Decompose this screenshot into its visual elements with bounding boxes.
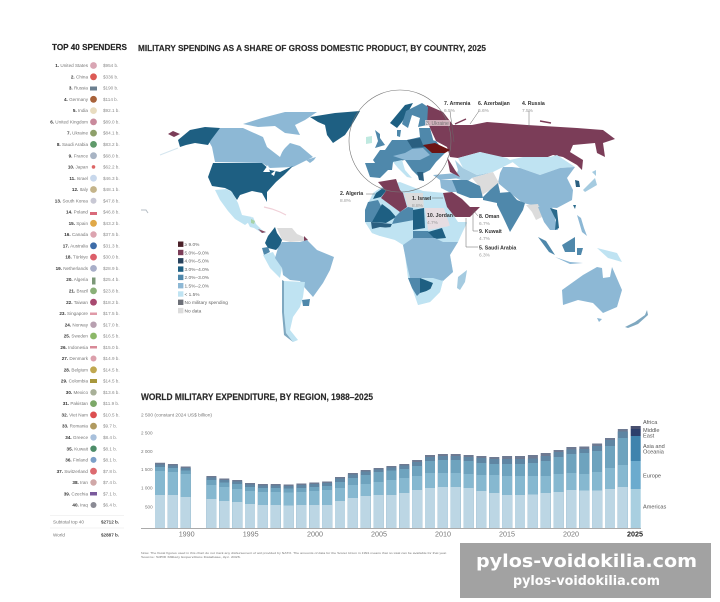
region labels: East: [643, 434, 655, 440]
world total: [50, 528, 124, 537]
region: Denmark: [397, 130, 401, 137]
row 26: $15.0 b.: [103, 345, 120, 350]
row 38: 38. Iran: [72, 480, 88, 485]
region labels: Americas: [643, 504, 667, 510]
region: Brazil and Bolivia: [275, 240, 334, 297]
region: Central America: [247, 217, 266, 233]
region: Suriname: [304, 236, 308, 242]
Panama accent: [258, 229, 266, 233]
series: Africa: [155, 429, 628, 528]
row 6: $89.0 b.: [103, 120, 120, 124]
row 37: [57, 468, 117, 475]
region labels: Middle: [643, 428, 659, 434]
region: Peru: [263, 252, 282, 278]
Europe landmass: [373, 137, 445, 176]
row 23: $17.5 b.: [103, 311, 120, 316]
region: Libya: [404, 193, 424, 208]
callout: Kuwait: 4.7%: [479, 236, 491, 242]
row 25: 25. Sweden: [64, 334, 88, 339]
row 5: $92.1 b.: [103, 108, 120, 113]
row 11: 11. Israel: [69, 176, 88, 181]
callout: Oman: 8. Oman: [479, 214, 499, 220]
Hawaii: [141, 210, 148, 213]
row 7: $84.1 b.: [103, 131, 120, 136]
watermark: [460, 543, 711, 598]
row 11: [69, 175, 120, 182]
region: Turkey: [433, 173, 460, 180]
row 8: [57, 141, 120, 148]
row 33: [62, 423, 117, 430]
row 40: [72, 502, 117, 508]
region labels: Europe: [643, 474, 661, 480]
region: Central Africa band: [413, 231, 435, 238]
callout: Jordan: 4.7%: [427, 220, 439, 226]
row 18: [65, 254, 120, 260]
region: Argentina: [283, 281, 305, 342]
region: Kazakhstan: [458, 152, 513, 175]
Great Lakes: [263, 165, 276, 176]
row 3: 3. Russia: [69, 86, 88, 91]
heading: map title: MILITARY SPENDING AS A SHARE OF GROSS DOMESTIC PRODUCT, BY COUNTRY, 2025: [138, 43, 486, 53]
row 31: $11.9 b.: [103, 401, 119, 406]
region: Greenland: [310, 111, 360, 143]
row 1: $954 b.: [103, 63, 118, 68]
row 3: [69, 86, 118, 91]
row 2: [71, 73, 118, 80]
row 21: 21. Brazil: [69, 288, 88, 294]
Aleutians: [160, 148, 178, 155]
row 7: [67, 130, 120, 137]
row 38: $7.4 b.: [103, 480, 117, 485]
row 15: [69, 220, 120, 227]
region: Iraq and Syria: [440, 180, 457, 192]
row 21: $23.8 b.: [103, 288, 120, 294]
region: Botswana: [420, 278, 433, 293]
label: Ukraine: 3. Ukraine: [426, 121, 449, 127]
region: Guinea coast: [365, 222, 392, 236]
row 16: 16. Canada: [64, 232, 88, 237]
row 39: [64, 491, 117, 496]
row 29: [61, 379, 120, 384]
row 7: 7. Ukraine: [67, 131, 88, 136]
region: Baltics and Belarus: [419, 128, 434, 145]
row 26: 26. Indonesia: [60, 345, 88, 350]
world map: [141, 90, 648, 342]
footnote: Note: The fiscal figures used in this chart do not track any disbursement of aid provided by NATO. The amounts of data for the Soviet Union in 1991 means that no total can be available for that year.: [141, 551, 447, 555]
row 16: [64, 231, 120, 238]
Caribbean: [264, 207, 286, 215]
row 20: $25.4 b.: [103, 277, 120, 282]
region: Australia: [562, 267, 622, 313]
region: Afghanistan: [472, 172, 499, 195]
row 15: $43.2 b.: [103, 221, 120, 226]
Central Asia: [455, 160, 493, 182]
row 1: [55, 62, 118, 69]
region: China: [498, 167, 575, 208]
callout: Israel: 1. Israel: [412, 196, 432, 202]
x axis year labels: 2025: [627, 530, 643, 538]
row 10: [68, 164, 120, 170]
callout lines: [366, 111, 529, 247]
row 24: $17.0 b.: [103, 322, 120, 327]
row 20: [66, 277, 120, 284]
row 27: $14.9 b.: [103, 356, 120, 361]
y axis labels: 2 500: [141, 430, 153, 436]
stacked bar chart: [155, 426, 641, 528]
region: Italy: [393, 160, 412, 178]
row 14: $46.8 b.: [103, 210, 120, 215]
row 28: $14.5 b.: [103, 367, 120, 372]
series: Middle East: [155, 432, 628, 528]
row 32: $10.5 b.: [103, 412, 120, 418]
region: Japan: [583, 170, 597, 192]
row 38: [72, 479, 117, 486]
x axis year labels: 1990: [179, 530, 195, 538]
y axis labels: 1 500: [141, 467, 153, 472]
row 11: $46.3 b.: [103, 176, 120, 181]
region: Tasmania: [597, 318, 602, 322]
row 30: $13.6 b.: [103, 390, 120, 395]
region labels: Oceania: [643, 450, 665, 456]
row 13: $47.8 b.: [103, 198, 120, 203]
inset circle: Europe: [349, 90, 451, 192]
region: Thailand and Indochina: [538, 207, 558, 230]
series: Europe: [155, 465, 628, 528]
Arctic islands: [455, 119, 551, 124]
row 23: [59, 311, 120, 316]
row 35: 35. Kuwait: [67, 446, 89, 451]
region: Java: [555, 257, 583, 264]
region: Canada: [208, 112, 317, 168]
region: Egypt: [423, 193, 444, 208]
row 28: [64, 366, 120, 373]
row 19: $28.9 b.: [103, 266, 120, 271]
world total: $2887 b.: [101, 532, 119, 537]
row 2: 2. China: [71, 74, 88, 79]
callout: Israel: 8.8%: [412, 203, 424, 209]
map legend: 3.0%–4.0%: [184, 267, 210, 273]
region: Norway: [390, 103, 413, 128]
region: Korea: [575, 180, 580, 187]
chart subtitle: 2 500 (constant 2024 US$ billion): [141, 412, 212, 418]
row 37: $7.8 b.: [103, 469, 117, 474]
region: Mali: [372, 204, 396, 223]
x axis year labels: 2015: [499, 530, 515, 538]
row 10: $62.2 b.: [103, 164, 120, 170]
footnote: Source: SIPRI Military Expenditure Database, Apr. 2026.: [141, 555, 241, 559]
region: Uruguay: [302, 299, 310, 306]
row 3: $190 b.: [103, 86, 118, 91]
row 35: $8.1 b.: [103, 446, 117, 451]
region: Central and East Africa: [403, 238, 458, 281]
region: Iran: [450, 180, 483, 198]
x axis year labels: 2020: [563, 530, 579, 538]
region: Madagascar: [457, 270, 467, 290]
region: Burkina band: [371, 222, 392, 229]
row 4: $114 b.: [103, 97, 118, 102]
region: Greece: [417, 172, 424, 181]
row 33: $9.7 b.: [103, 424, 117, 429]
row 29: 29. Colombia: [61, 379, 88, 384]
row 10: 10. Japan: [68, 164, 88, 170]
x axis year labels: 2000: [307, 530, 323, 538]
series: Asia and Oceania: [155, 438, 628, 528]
callout: Kuwait: [479, 229, 502, 242]
region labels: [643, 420, 667, 510]
row 17: $31.3 b.: [103, 243, 120, 248]
row 21: [69, 288, 120, 294]
map legend: 1.5%–2.0%: [184, 284, 210, 290]
callout: Russia: [522, 101, 545, 114]
map legend: < 1.5%: [184, 292, 200, 298]
region: Niger: [392, 207, 414, 224]
callout: Saudi Arabia: [479, 246, 516, 258]
row 4: [64, 96, 118, 103]
region: Chad: [413, 208, 425, 230]
callout: Israel: [412, 196, 432, 209]
region: Sudan: [425, 208, 450, 230]
row 32: 32. Viet Nam: [62, 412, 88, 418]
callout: Armenia: 7. Armenia: [444, 101, 470, 107]
row 36: [65, 457, 117, 463]
row 34: [65, 434, 117, 441]
row 39: 39. Czechia: [64, 491, 88, 496]
y axis labels: 500: [145, 504, 153, 509]
callout: Jordan: [427, 213, 453, 226]
region: Mongolia: [510, 155, 575, 175]
region: South Sudan: [428, 228, 446, 239]
row 40: $6.4 b.: [103, 503, 117, 508]
callout: Russia: 4. Russia: [522, 101, 545, 107]
callout: Azerbaijan: 6. Azerbaijan: [478, 101, 510, 107]
footnote: [141, 551, 447, 559]
row 22: [66, 299, 120, 306]
x axis year labels: [179, 530, 643, 538]
region: Sumatra: [538, 237, 555, 255]
map legend: 4.0%–5.0%: [184, 259, 210, 265]
row 17: 17. Australia: [63, 243, 88, 248]
x axis year labels: 1995: [243, 530, 259, 538]
region: Venezuela and Guianas: [277, 228, 306, 242]
row 5: 5. India: [73, 108, 88, 113]
row 8: 8. Saudi Arabia: [57, 142, 88, 147]
callout: Jordan: 10. Jordan: [427, 213, 453, 219]
row 14: 14. Poland: [66, 210, 88, 215]
row 8: $83.2 b.: [103, 142, 120, 147]
row 9: $68.0 b.: [103, 153, 120, 158]
callout: Azerbaijan: 6.6%: [478, 108, 490, 114]
region: New Guinea: [597, 248, 622, 262]
map legend: 5.0%–9.0%: [184, 250, 210, 256]
row 18: 18. Türkiye: [65, 255, 88, 260]
map legend: No military spending: [184, 300, 228, 306]
Chukotka: [168, 131, 180, 137]
row 25: $16.5 b.: [103, 334, 120, 339]
row 35: [67, 446, 117, 452]
callout: Algeria: 8.8%: [340, 198, 352, 204]
region: Vietnam: [550, 208, 559, 230]
callout: Saudi Arabia: 6.3%: [479, 252, 491, 258]
callout: Kuwait: 9. Kuwait: [479, 229, 502, 235]
region: UK: [375, 130, 385, 148]
region: Saudi Arabia: [443, 192, 480, 217]
callout: Armenia: 6.5%: [444, 108, 456, 114]
row 32: [62, 412, 120, 418]
region: Russia: [424, 105, 615, 170]
row 1: 1. United States: [55, 63, 89, 68]
region: Chile: [282, 280, 293, 342]
row 13: [55, 198, 120, 204]
callout: Algeria: 2. Algeria: [340, 191, 363, 197]
row 4: 4. Germany: [64, 97, 89, 102]
Guatemala accent: [251, 219, 255, 224]
callout: Russia: 7.5%: [522, 108, 534, 114]
row 20: 20. Algeria: [66, 277, 88, 282]
row 6: [50, 118, 120, 125]
region: Sweden and Finland: [402, 103, 428, 128]
region: New Zealand: [625, 310, 648, 328]
world total: World: [53, 532, 65, 537]
region: Philippines: [577, 215, 587, 236]
row 30: [66, 389, 120, 395]
row 33: 33. Romania: [62, 424, 88, 429]
subtotal: [50, 516, 124, 525]
Africa landmass: [365, 182, 467, 305]
row 12: 12. Italy: [72, 187, 89, 192]
Hudson Bay: [266, 134, 289, 155]
row 19: 19. Netherlands: [56, 266, 89, 271]
region: Colombia: [265, 227, 282, 250]
row 40: 40. Iraq: [72, 503, 88, 508]
y axis labels: 2 000: [141, 449, 153, 454]
region: Morocco: [373, 188, 386, 199]
callout: Armenia: [444, 101, 470, 114]
row 16: $37.5 b.: [103, 232, 120, 237]
bar: 2025: [631, 426, 641, 528]
row 31: 31. Pakistan: [63, 401, 88, 406]
region: India: [497, 192, 525, 232]
row 29: $14.5 b.: [103, 379, 120, 384]
row 13: 13. South Korea: [55, 198, 88, 203]
region: Poland: [407, 138, 425, 148]
row 19: [56, 265, 120, 272]
region: Mexico: [215, 189, 252, 225]
row 26: [60, 345, 120, 350]
callout: Oman: 6.7%: [479, 221, 491, 227]
callout: Algeria: [340, 191, 363, 204]
region: Sulawesi: [577, 248, 583, 255]
row 18: $30.0 b.: [103, 255, 120, 260]
map legend: No data: [184, 308, 202, 314]
watermark: pylos-voidokilia.com: [476, 551, 697, 572]
row 5: [73, 107, 120, 114]
x axis: [141, 527, 641, 529]
region: Mauritania and Senegal: [365, 200, 387, 222]
row 22: 22. Taiwan: [66, 300, 88, 305]
map legend: 2.0%–3.0%: [184, 275, 210, 281]
x axis year labels: 2010: [435, 530, 451, 538]
row 27: 27. Denmark: [62, 356, 89, 361]
region: South Africa: [417, 280, 443, 305]
row 22: $18.2 b.: [103, 300, 120, 305]
region: Borneo: [562, 237, 575, 252]
subtotal: Subtotal top 40: [53, 520, 84, 525]
heading: top 40 spenders: TOP 40 SPENDERS: [52, 43, 128, 52]
row 12: $48.1 b.: [103, 187, 120, 192]
region: Spain and Portugal: [365, 163, 388, 178]
panel: top 40 spenders list: [50, 62, 124, 537]
region: Alaska: [178, 127, 220, 147]
row 2: $336 b.: [103, 74, 118, 79]
callout: Oman: [479, 214, 499, 227]
region: Ireland: [366, 136, 372, 144]
region: Central Europe: [393, 148, 430, 160]
y axis labels: 1 000: [141, 485, 153, 490]
row 9: 9. France: [69, 153, 88, 158]
row 36: 36. Finland: [65, 458, 88, 462]
row 24: 24. Norway: [65, 322, 89, 327]
region: Taiwan: [573, 205, 576, 209]
region: Namibia: [408, 278, 420, 296]
callout: Azerbaijan: [478, 101, 510, 114]
callout: Saudi Arabia: 5. Saudi Arabia: [479, 246, 516, 252]
row 17: [63, 242, 120, 249]
row 31: [63, 400, 119, 407]
row 30: 30. Mexico: [66, 390, 88, 395]
heading: chart title: WORLD MILITARY EXPENDITURE, BY REGION, 1988–2025: [141, 392, 373, 402]
row 12: [72, 186, 120, 193]
region labels: Africa: [643, 420, 658, 426]
x axis year labels: 2005: [371, 530, 387, 538]
region: Horn of Africa: [445, 223, 467, 241]
row 9: [69, 152, 120, 159]
map legend: ≥ 9.0%: [184, 242, 200, 248]
region: Nigeria: [392, 222, 413, 245]
region: Caucasus: [447, 157, 460, 177]
row 34: 34. Greece: [65, 435, 88, 440]
row 25: [64, 333, 120, 339]
region: Algeria: [378, 179, 407, 212]
row 27: [62, 356, 120, 362]
row 34: $8.4 b.: [103, 435, 117, 440]
region: USA: [208, 163, 293, 202]
row 24: [65, 322, 120, 328]
region labels: Asia and: [643, 444, 665, 450]
map legend: [178, 242, 228, 314]
row 28: 28. Belgium: [64, 367, 88, 372]
region: Myanmar: [526, 204, 542, 220]
y axis labels: [141, 430, 153, 509]
watermark: pylos-voidokilia.com: [513, 574, 660, 589]
row 14: [66, 210, 120, 215]
region: Pakistan: [483, 183, 500, 203]
region: Ukraine: [423, 143, 450, 153]
subtotal: $2712 b.: [101, 520, 119, 525]
row 39: $7.1 b.: [103, 491, 117, 496]
region: Ecuador: [262, 247, 270, 255]
row 23: 23. Singapore: [59, 311, 88, 316]
row 36: $8.1 b.: [103, 458, 117, 462]
series: Americas: [155, 487, 628, 528]
row 37: 37. Switzerland: [57, 469, 88, 474]
row 6: 6. United Kingdom: [50, 120, 88, 124]
row 15: 15. Spain: [69, 221, 88, 226]
